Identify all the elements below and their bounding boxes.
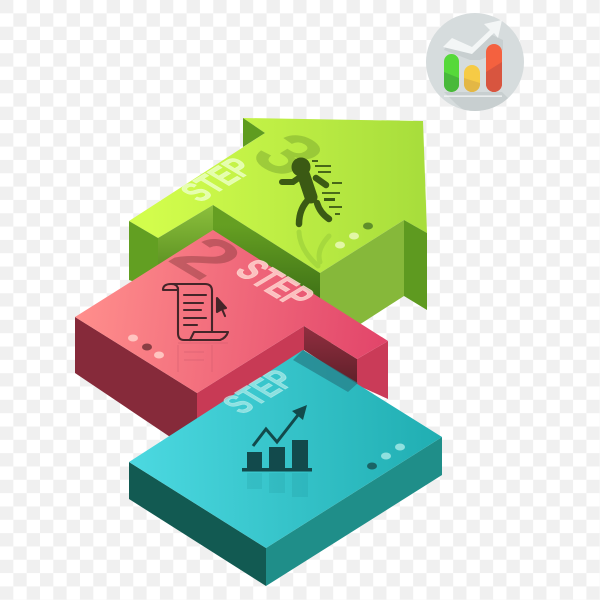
teal STEP label: STEP [213,364,305,419]
green bar [444,54,459,92]
running person reflection [299,232,329,266]
panel: teal step 1 block [129,350,442,586]
icon: running person [282,158,342,224]
green STEP label: STEP [171,152,263,207]
red left wall [75,317,197,455]
icon: bar chart badge [426,13,525,115]
green top face [129,118,427,273]
icon: growth chart [242,405,312,472]
teal right wall [266,437,442,586]
red STEP label: STEP [225,254,324,313]
red top face [75,230,388,393]
green dots [335,222,373,248]
number 1 shadow [293,350,358,392]
red dots [128,334,164,358]
icon: scroll with cursor [163,284,228,340]
chart reflection [247,473,308,497]
yellow bar [464,65,480,92]
teal dots [367,444,405,470]
panel: red step 2 block [75,230,388,436]
teal top face [129,350,442,548]
red bar [486,44,502,92]
trend arrow [443,20,502,54]
number 2: 2 [151,225,261,291]
number 3: 3 [232,120,345,188]
teal left wall [129,462,266,586]
scroll reflection [178,343,228,372]
panel: green step 3 arrow [129,118,427,350]
